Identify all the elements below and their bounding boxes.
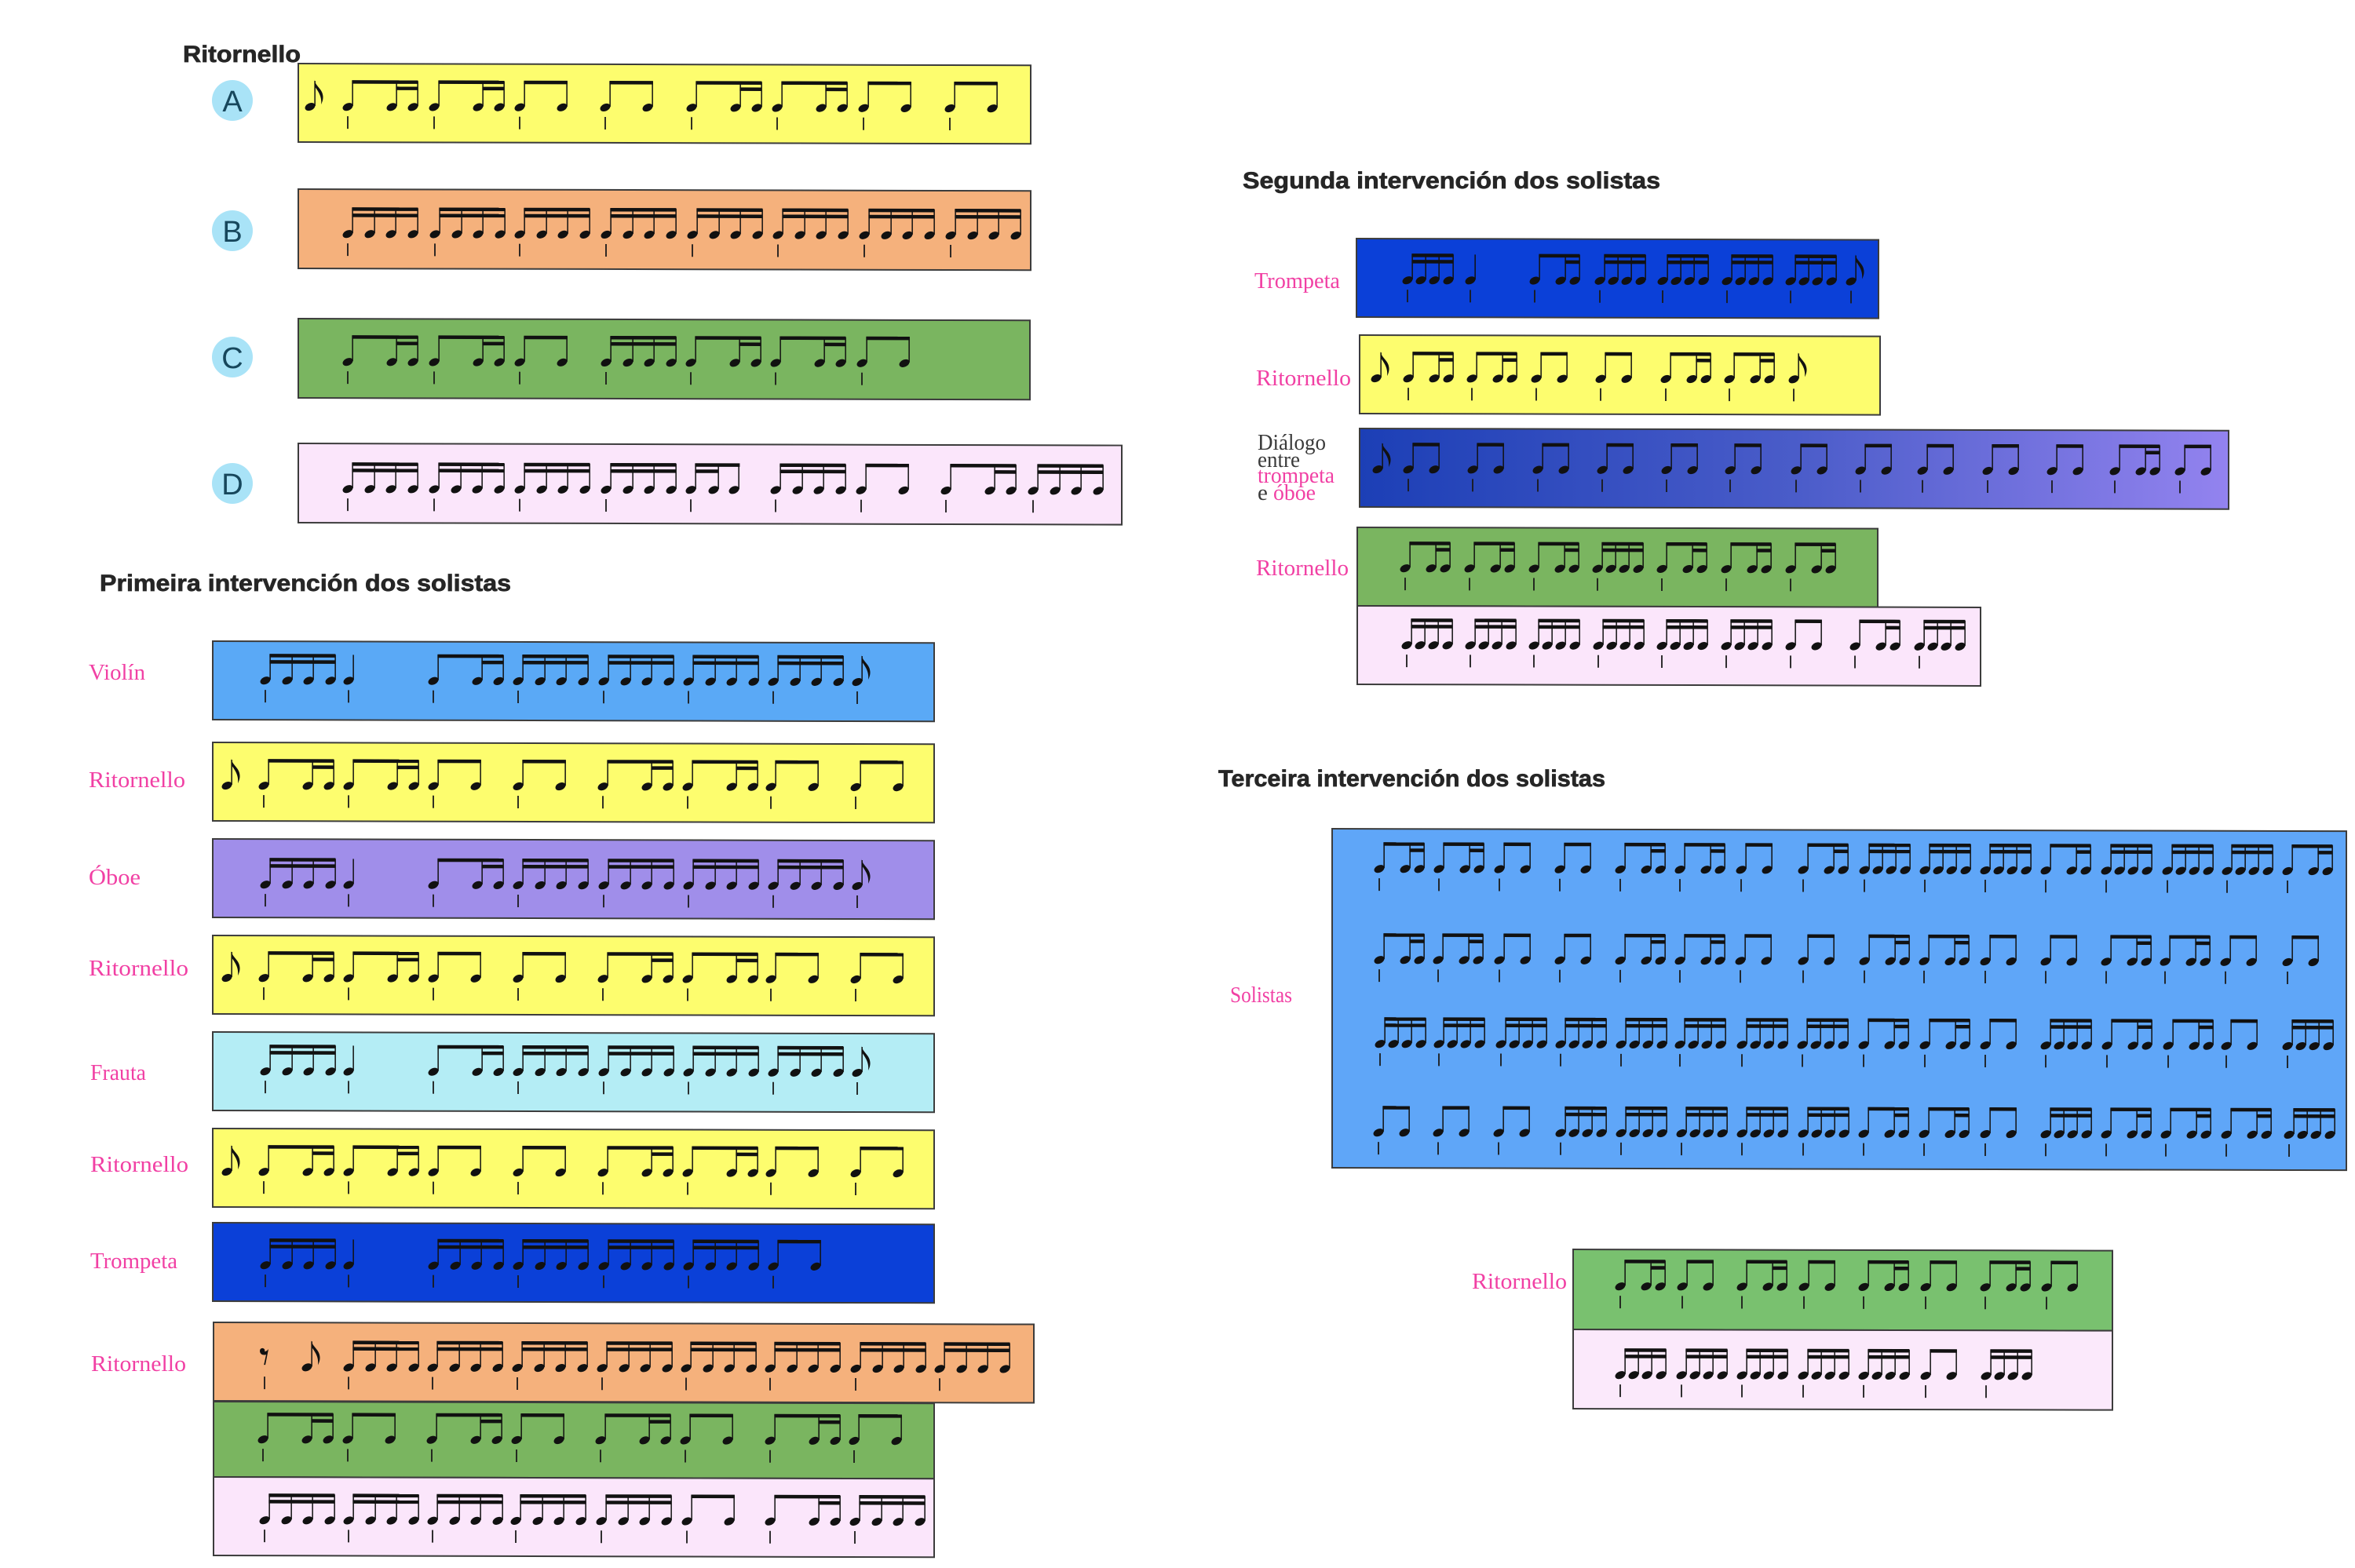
- bar: ritornello final green: [214, 1402, 934, 1479]
- heading: Primeira intervención dos solistas: Primeira intervención dos solistas: [100, 571, 511, 596]
- line 3: [1374, 1017, 2335, 1068]
- label: Ritornello final: Ritornello: [91, 1351, 186, 1377]
- label: Ritornello double: Ritornello: [1256, 556, 1349, 581]
- theme D bar: [298, 443, 1122, 525]
- theme B bar: [298, 189, 1031, 270]
- bar: diálogo: [1360, 428, 2229, 509]
- panel: ritornello themes A to D: [183, 42, 1122, 525]
- block: solistas four rhythm lines: [1332, 829, 2346, 1170]
- label: Diálogo entre trompeta e óboe: Diálogo: [1258, 430, 1326, 455]
- bar: closing ritornello green: [1573, 1249, 2112, 1331]
- bar: ritornello final orange: [214, 1322, 1034, 1403]
- bar: ritornello yellow: [1360, 335, 1880, 415]
- badge A: A: [222, 86, 243, 119]
- label: Ritornello 2: Ritornello: [89, 956, 188, 981]
- badge D: [212, 463, 253, 504]
- label: Trompeta: Trompeta: [1254, 268, 1340, 294]
- panel: segunda intervención: [1243, 168, 2229, 686]
- bar: ritornello pink: [1357, 606, 1981, 686]
- label: Diálogo entre trompeta e óboe: e: [1258, 480, 1268, 505]
- bar: closing ritornello pink: [1573, 1329, 2112, 1410]
- badge D: D: [221, 469, 243, 501]
- heading: Ritornello: Ritornello: [183, 42, 301, 67]
- heading: Terceira intervención dos solistas: Terceira intervención dos solistas: [1218, 766, 1605, 792]
- bar: óboe: [213, 839, 934, 919]
- label: Violín: Violín: [89, 660, 145, 685]
- label: Ritornello 1: Ritornello: [89, 768, 185, 793]
- badge A: [212, 80, 253, 121]
- line 2: [1373, 933, 2320, 984]
- label: Solistas: Solistas: [1230, 983, 1292, 1008]
- label: Óboe: Óboe: [89, 864, 141, 890]
- bar: ritornello 1: [213, 742, 934, 822]
- badge C: [212, 337, 253, 377]
- label: Ritornello 3: Ritornello: [90, 1152, 188, 1177]
- label: Diálogo entre trompeta e óboe: [1258, 430, 1334, 505]
- bar: ritornello 2: [213, 935, 934, 1016]
- label: Diálogo entre trompeta e óboe: entre: [1258, 447, 1300, 472]
- bar: trompeta: [213, 1223, 934, 1303]
- badge B: B: [222, 216, 243, 249]
- bar: ritornello final pink: [214, 1477, 934, 1557]
- label: Diálogo entre trompeta e óboe: trompeta: [1258, 463, 1334, 488]
- badge B: [212, 210, 253, 251]
- panel: primeira intervención: [89, 571, 1034, 1557]
- bar: frauta: [213, 1032, 934, 1112]
- bar: ritornello 3: [213, 1129, 934, 1209]
- label: Trompeta: Trompeta: [90, 1249, 177, 1274]
- bar: violín: [213, 641, 934, 721]
- label: Diálogo entre trompeta e óboe: óboe: [1273, 480, 1316, 505]
- label: Frauta: Frauta: [90, 1060, 146, 1085]
- theme A bar: [298, 64, 1031, 144]
- line 4: [1372, 1106, 2336, 1157]
- theme C bar: [298, 319, 1030, 399]
- label: Ritornello: Ritornello: [1256, 366, 1351, 391]
- heading: Segunda intervención dos solistas: Segunda intervención dos solistas: [1243, 168, 1660, 194]
- bar: ritornello green: [1357, 527, 1878, 607]
- panel: terceira intervención: [1218, 766, 2346, 1410]
- bar: trompeta: [1356, 239, 1879, 319]
- line 1: [1373, 842, 2334, 893]
- badge C: C: [221, 342, 243, 375]
- label: Ritornello closing: Ritornello: [1472, 1269, 1567, 1294]
